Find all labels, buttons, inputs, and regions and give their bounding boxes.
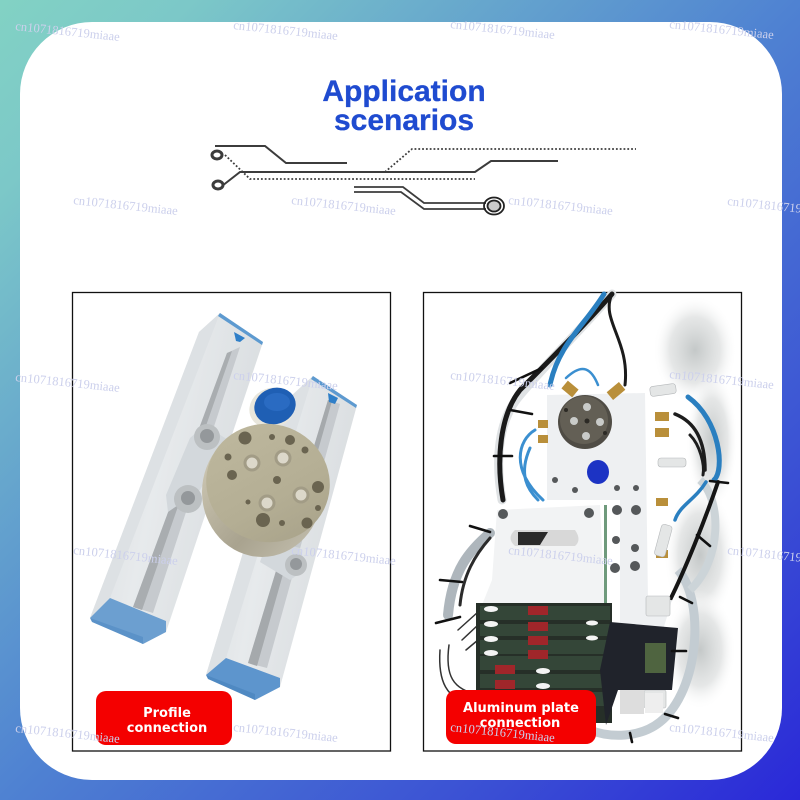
panel frame — [424, 292, 742, 751]
panel: aluminum plate connection — [424, 292, 742, 751]
title: scenarios — [334, 104, 474, 137]
watermarks: cn1071816719miaae — [73, 543, 179, 568]
watermarks: cn1071816719miaae — [508, 543, 614, 568]
watermarks: cn1071816719miaae — [15, 721, 121, 746]
rotary actuator — [193, 410, 343, 557]
label: aluminum plate connection — [446, 690, 596, 744]
watermarks: cn1071816719miaae — [233, 368, 339, 393]
watermarks: cn1071816719miaae — [291, 543, 397, 568]
mounting clamps — [166, 424, 307, 580]
white push-in connectors — [644, 383, 686, 708]
right aluminium profile — [206, 376, 357, 700]
title: Application — [322, 75, 486, 108]
left aluminium profile — [90, 313, 263, 644]
watermarks: cn1071816719miaae — [233, 18, 339, 43]
watermarks: cn1071816719miaae — [233, 720, 339, 745]
title — [322, 75, 486, 137]
rotary actuator — [558, 395, 612, 449]
label: aluminum plate connection: connection — [480, 716, 560, 731]
watermarks: cn1071816719miaae — [669, 720, 775, 745]
watermarks: cn1071816719miaae — [450, 368, 556, 393]
label: aluminum plate connection: Aluminum plate — [463, 701, 579, 716]
watermarks: cn1071816719miaae — [450, 17, 556, 42]
watermarks: cn1071816719miaae — [15, 19, 121, 44]
blue plug — [587, 460, 609, 484]
label: profile connection: Profile — [143, 706, 191, 721]
panel frame — [72, 292, 390, 751]
watermarks: cn1071816719miaae — [291, 193, 397, 218]
watermarks: cn1071816719miaae — [450, 720, 556, 745]
aluminium mounting plate — [480, 393, 672, 640]
watermarks: cn1071816719miaae — [508, 193, 614, 218]
brass fittings — [538, 381, 669, 558]
circuit line decoration — [212, 146, 636, 214]
cable ties — [436, 368, 728, 742]
watermarks: cn1071816719miaae — [73, 193, 179, 218]
cables and tubes — [440, 294, 719, 705]
watermarks: cn1071816719miaae — [669, 17, 775, 42]
grey tube coil shadows — [590, 295, 738, 735]
panel: profile connection — [72, 292, 390, 751]
blue plug — [244, 381, 301, 435]
label: profile connection — [96, 691, 232, 745]
wiring bundle — [600, 622, 678, 725]
watermarks: cn1071816719miaae — [669, 367, 775, 392]
label: profile connection: connection — [127, 721, 207, 736]
watermarks: cn1071816719miaae — [15, 370, 121, 395]
fibre amplifier bank — [476, 603, 612, 723]
